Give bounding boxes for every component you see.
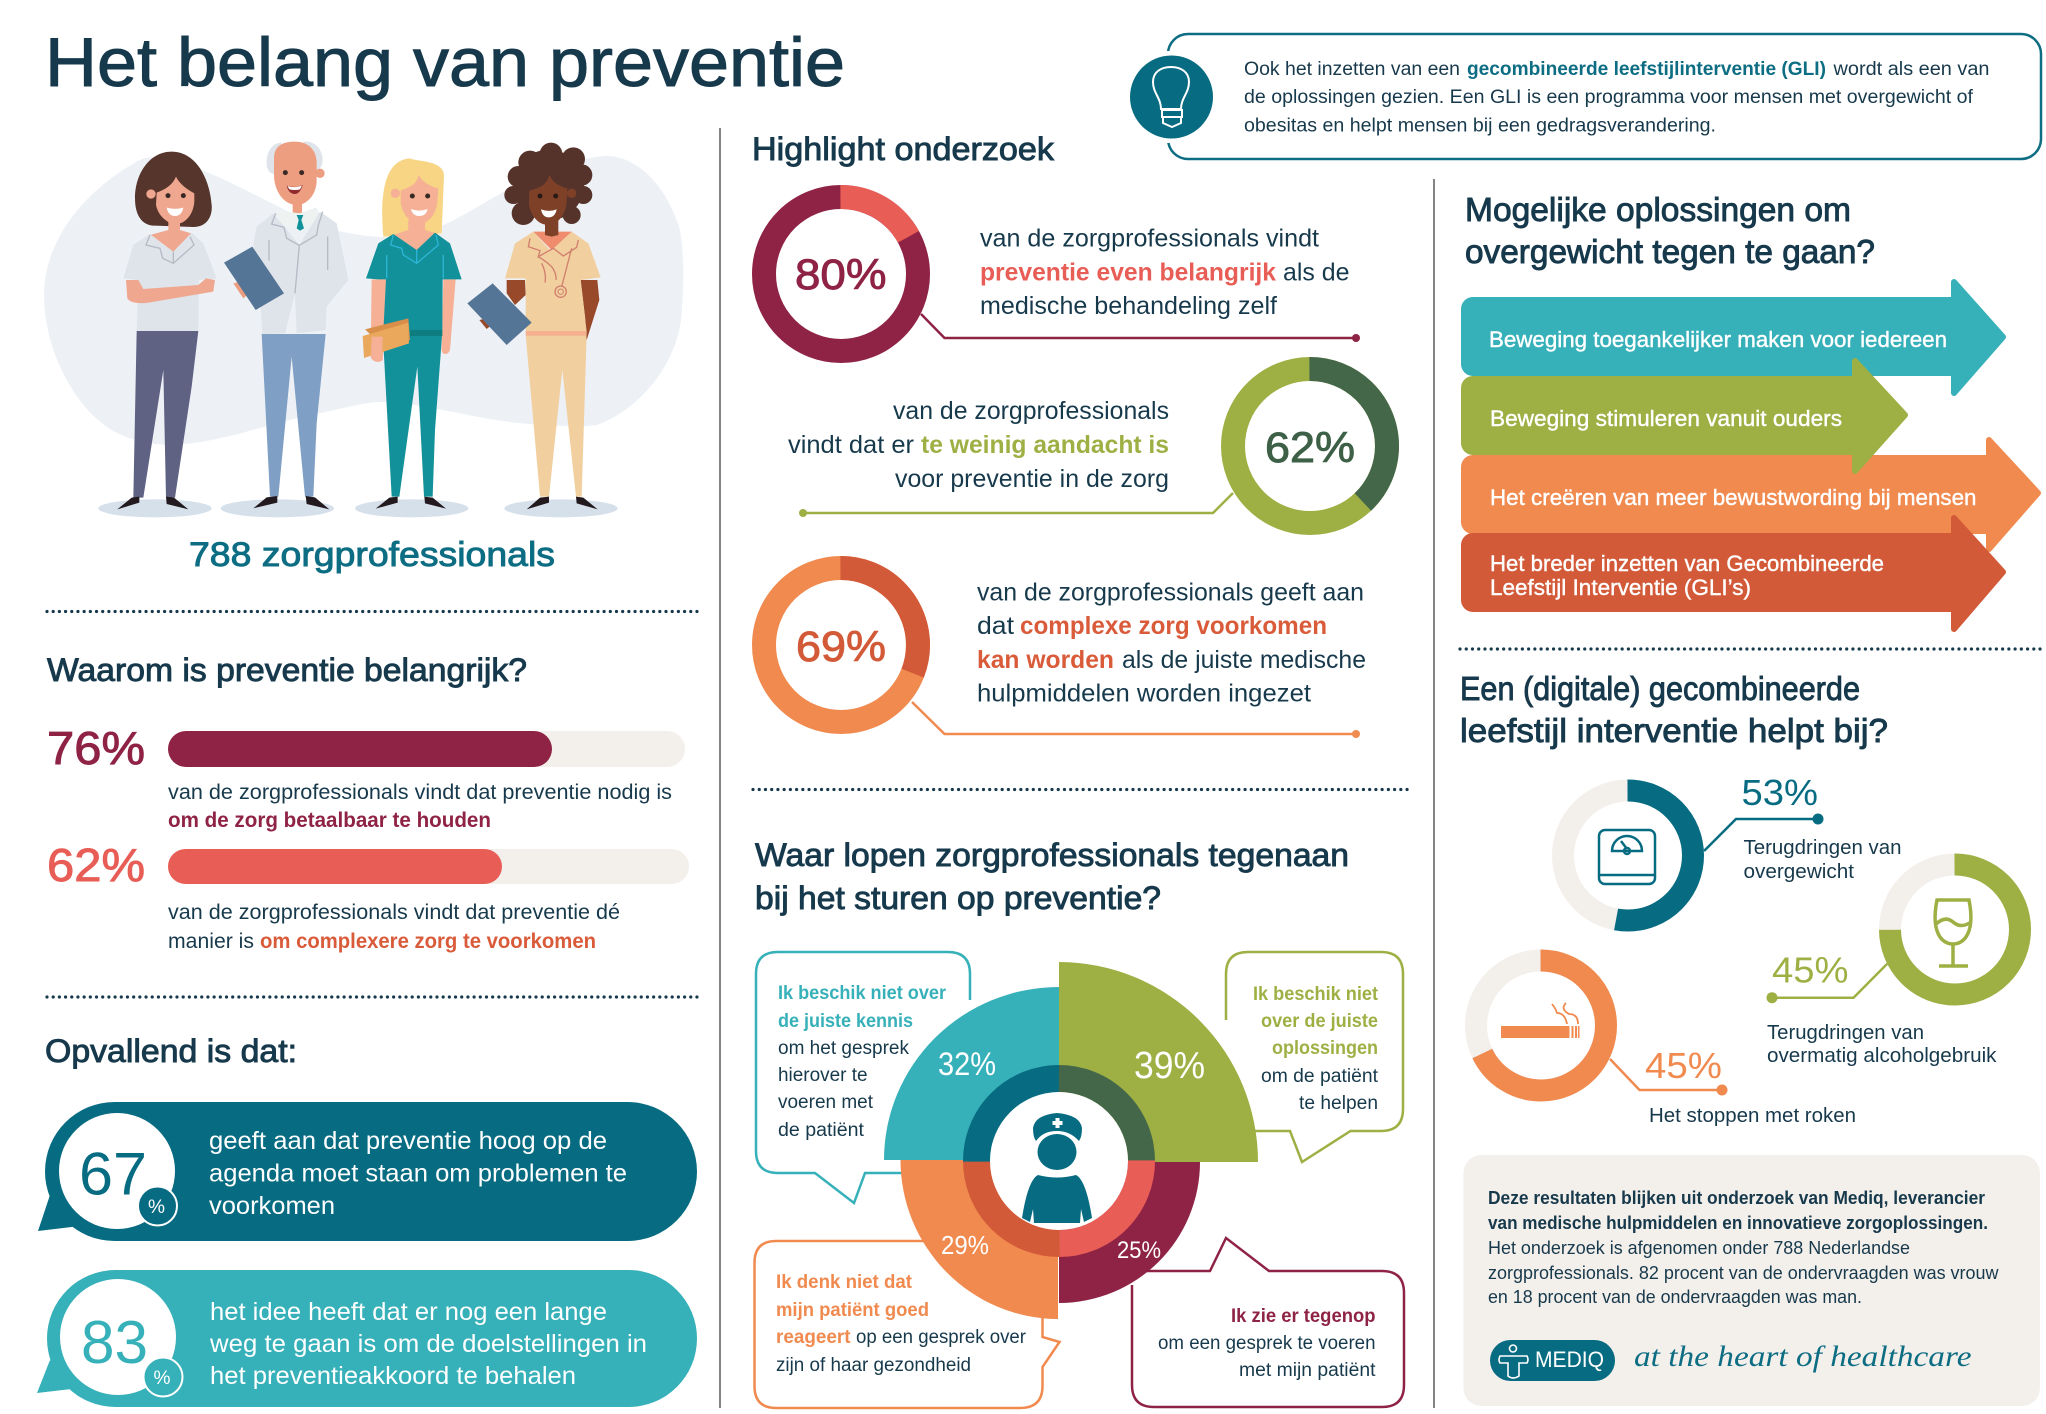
donut: 62% — [788, 369, 1387, 523]
callout: tegenop: met mijn patiënt — [1239, 1360, 1376, 1381]
donut: 45% roken: Het stoppen met roken — [1649, 1105, 1856, 1127]
figures 3 and 4 — [355, 143, 618, 517]
donut: 62%: te weinig aandacht is — [921, 431, 1169, 459]
callout: reageert: mijn patiënt goed — [776, 1300, 929, 1321]
callout: 67 percent: geeft aan dat preventie hoog op de — [209, 1127, 607, 1155]
donut: 53% overgewicht — [1563, 772, 1902, 920]
callout: 83 percent: % — [154, 1368, 171, 1389]
heading: Waar lopen zorgprofessionals tegenaan — [755, 837, 1349, 873]
callout: tegenop — [1132, 1238, 1404, 1407]
callout: oplossingen: over de juiste — [1261, 1011, 1378, 1032]
figure: older male doctor with clipboard — [221, 141, 348, 517]
callout: GLI info box: obesitas en helpt mensen bij een gedragsverandering. — [1244, 116, 1716, 136]
icon: wine glass — [1935, 900, 1971, 966]
donut: 62%: 62% — [1265, 424, 1355, 472]
donut: 62%: van de zorgprofessionals — [893, 397, 1169, 425]
chart: radial quarter segments: 25% — [1117, 1237, 1161, 1264]
donut: 80%: van de zorgprofessionals vindt — [980, 224, 1319, 252]
heading: Een (digitale) gecombineerde — [1460, 670, 1860, 707]
panel: mogelijke oplossingen — [1461, 191, 2038, 629]
callout: reageert: Ik denk niet dat — [776, 1272, 913, 1293]
figure: woman with folded arms — [98, 152, 217, 517]
callout: oplossingen: om de patiënt — [1261, 1066, 1379, 1087]
callout: kennis: voeren met — [778, 1092, 874, 1113]
logo: Mediq: MEDIQ — [1535, 1347, 1604, 1372]
chart: radial quarter segments: 32% — [938, 1046, 996, 1082]
donut: 53% overgewicht: overgewicht — [1744, 861, 1854, 883]
chart: radial quarter segments: 29% — [941, 1230, 989, 1260]
figures 1 and 2 — [98, 141, 348, 517]
callout: reageert: zijn of haar gezondheid — [776, 1355, 971, 1376]
donut: 69%: hulpmiddelen worden ingezet — [977, 680, 1311, 708]
background blob — [44, 156, 683, 445]
heading: leefstijl interventie helpt bij? — [1460, 712, 1888, 749]
stat: 62% bar — [47, 839, 689, 953]
callout: reageert: reageert — [776, 1327, 851, 1348]
callout: 67 percent: % — [148, 1197, 165, 1218]
panel: about the research: van medische hulpmiddelen en innovatieve zorgoplossingen. — [1488, 1213, 1988, 1233]
callout: oplossingen: Ik beschik niet — [1253, 984, 1379, 1005]
arrow: het breder inzetten: Het breder inzetten van Gecombineerde — [1490, 551, 1884, 576]
chart: radial quarter segments: 39% — [1134, 1045, 1205, 1087]
callout: kennis: om het gesprek — [778, 1038, 909, 1059]
panel: about the research: zorgprofessionals. 82 procent van de ondervraagden was vrouw — [1488, 1263, 1999, 1283]
figure: nurse with stethoscope and clipboard — [467, 143, 618, 517]
arrow: beweging toegankelijker — [1461, 282, 2003, 393]
donut: 69%: kan worden — [977, 646, 1114, 674]
callout: GLI info box: de oplossingen gezien. Een GLI is een programma voor mensen met overgewicht of — [1244, 87, 1974, 108]
donut: 69%: complexe zorg voorkomen — [1020, 612, 1327, 640]
donut: 45% alcohol: Terugdringen van — [1767, 1022, 1924, 1044]
arrow: het creëren — [1461, 440, 2038, 549]
heading: Highlight onderzoek — [752, 131, 1055, 167]
heading: overgewicht tegen te gaan? — [1465, 233, 1875, 270]
arrow: het creëren: Het creëren van meer bewustwording bij mensen — [1490, 485, 1976, 510]
heading: bij het sturen op preventie? — [755, 880, 1161, 916]
callout: 83 percent — [37, 1270, 697, 1407]
panel: opvallend is dat — [37, 1033, 697, 1407]
icon: cigarette — [1501, 1003, 1580, 1038]
callout: GLI info box — [1130, 34, 2041, 159]
callout: 83 percent: het preventieakkoord te behalen — [210, 1362, 576, 1390]
donut: 69%: 69% — [796, 623, 886, 671]
stat: 62% bar: om complexere zorg te voorkomen — [260, 930, 596, 953]
donut: 69% — [764, 568, 1366, 738]
logo: Mediq — [1490, 1340, 1615, 1381]
donut: 45% alcohol: 45% — [1772, 950, 1848, 991]
donut: 80% — [764, 197, 1360, 351]
panel: waar lopen zorgprofessionals tegenaan — [754, 837, 1404, 1408]
callout: oplossingen: te helpen — [1299, 1093, 1378, 1114]
callout: 67 percent: 67 — [79, 1140, 147, 1208]
stat: 76% bar: van de zorgprofessionals vindt dat preventie nodig is — [168, 781, 672, 804]
callout: 67 percent: agenda moet staan om problemen te — [209, 1160, 627, 1188]
stat: 76% bar: om de zorg betaalbaar te houden — [168, 809, 491, 832]
callout: kennis: de juiste kennis — [778, 1011, 913, 1032]
icon: nurse — [1022, 1113, 1092, 1223]
callout: GLI info box: Ook het inzetten van een — [1244, 59, 1460, 80]
tagline: at the heart of healthcare — [1634, 1340, 1972, 1373]
illustration: healthcare professionals — [44, 141, 683, 574]
heading — [1460, 670, 1888, 749]
chart: radial quarter segments — [884, 962, 1258, 1319]
heading: Mogelijke oplossingen om — [1465, 191, 1851, 228]
donut: 80%: 80% — [795, 251, 886, 299]
icon: lightbulb — [1130, 56, 1213, 138]
icon: weighing scale — [1599, 830, 1655, 884]
callout: tegenop: om een gesprek te voeren — [1158, 1333, 1376, 1354]
donut: 69%: van de zorgprofessionals geeft aan — [977, 578, 1364, 606]
donut: 80%: als de — [1283, 258, 1350, 286]
panel: about the research: Het onderzoek is afgenomen onder 788 Nederlandse — [1488, 1238, 1910, 1258]
callout: 83 percent: het idee heeft dat er nog een lange — [210, 1298, 607, 1326]
callout: reageert: op een gesprek over — [856, 1327, 1027, 1348]
donut: 45% roken: 45% — [1645, 1045, 1722, 1086]
callout: 67 percent: voorkomen — [209, 1192, 335, 1220]
callout: kennis: de patiënt — [778, 1120, 865, 1141]
donut: 80%: preventie even belangrijk — [980, 258, 1276, 286]
donut: 62%: vindt dat er — [788, 431, 914, 459]
callout: oplossingen — [1226, 952, 1403, 1162]
callout: kennis — [756, 952, 970, 1203]
arrow: het breder inzetten — [1461, 518, 2003, 629]
stat: 62% bar: van de zorgprofessionals vindt dat preventie dé — [168, 901, 620, 924]
callout: 83 percent: 83 — [81, 1309, 148, 1376]
title: Het belang van preventie — [45, 24, 845, 101]
panel: waarom is preventie belangrijk — [47, 652, 689, 953]
heading: Waarom is preventie belangrijk? — [47, 652, 527, 688]
donut: 45% alcohol: overmatig alcoholgebruik — [1767, 1045, 1998, 1067]
stat: 62% bar: manier is — [168, 930, 254, 953]
callout: GLI info box: gecombineerde leefstijlinterventie (GLI) — [1467, 59, 1826, 80]
arrow: beweging stimuleren: Beweging stimuleren vanuit ouders — [1490, 406, 1842, 431]
callout: GLI info box: wordt als een van — [1832, 59, 1990, 80]
donut: 53% overgewicht: Terugdringen van — [1744, 837, 1902, 859]
donut: 53% overgewicht: 53% — [1742, 772, 1818, 813]
panel: about the research: Deze resultaten blijken uit onderzoek van Mediq, leverancier — [1488, 1188, 1985, 1208]
arrow: beweging toegankelijker: Beweging toegankelijker maken voor iedereen — [1489, 327, 1947, 352]
callout: reageert — [754, 1241, 1060, 1408]
panel: about the research: en 18 procent van de ondervraagden was man. — [1488, 1287, 1862, 1307]
panel: digitale leefstijl interventie — [1460, 670, 2020, 1127]
caption: 788 zorgprofessionals: 788 zorgprofessionals — [189, 536, 555, 574]
stat: 76% bar — [47, 722, 685, 832]
heading — [755, 837, 1349, 916]
arrow: het breder inzetten: Leefstijl Interventie (GLI’s) — [1490, 575, 1751, 600]
donut: 69%: dat — [977, 612, 1014, 640]
figure: blonde nurse in teal scrubs — [355, 158, 468, 517]
heading — [1465, 191, 1875, 270]
donut: 62%: voor preventie in de zorg — [895, 465, 1169, 493]
callout: oplossingen: oplossingen — [1272, 1038, 1378, 1059]
panel: highlight onderzoek — [752, 131, 1387, 738]
callout: kennis: hierover te — [778, 1065, 868, 1086]
stat: 76% bar: 76% — [47, 722, 145, 774]
heading: Opvallend is dat: — [45, 1033, 297, 1069]
donut: 45% alcohol — [1766, 864, 2020, 1067]
callout: tegenop: Ik zie er tegenop — [1231, 1306, 1376, 1327]
stat: 62% bar: 62% — [47, 839, 145, 891]
arrow: beweging stimuleren — [1461, 361, 1905, 471]
donut: 80%: medische behandeling zelf — [980, 292, 1277, 320]
panel: about the research — [1464, 1155, 2040, 1406]
callout: kennis: Ik beschik niet over — [778, 983, 947, 1004]
callout: 83 percent: weg te gaan is om de doelstellingen in — [209, 1330, 647, 1358]
callout: 67 percent — [38, 1102, 697, 1241]
donut: 45% roken — [1476, 960, 1856, 1127]
donut: 69%: als de juiste medische — [1122, 646, 1366, 674]
